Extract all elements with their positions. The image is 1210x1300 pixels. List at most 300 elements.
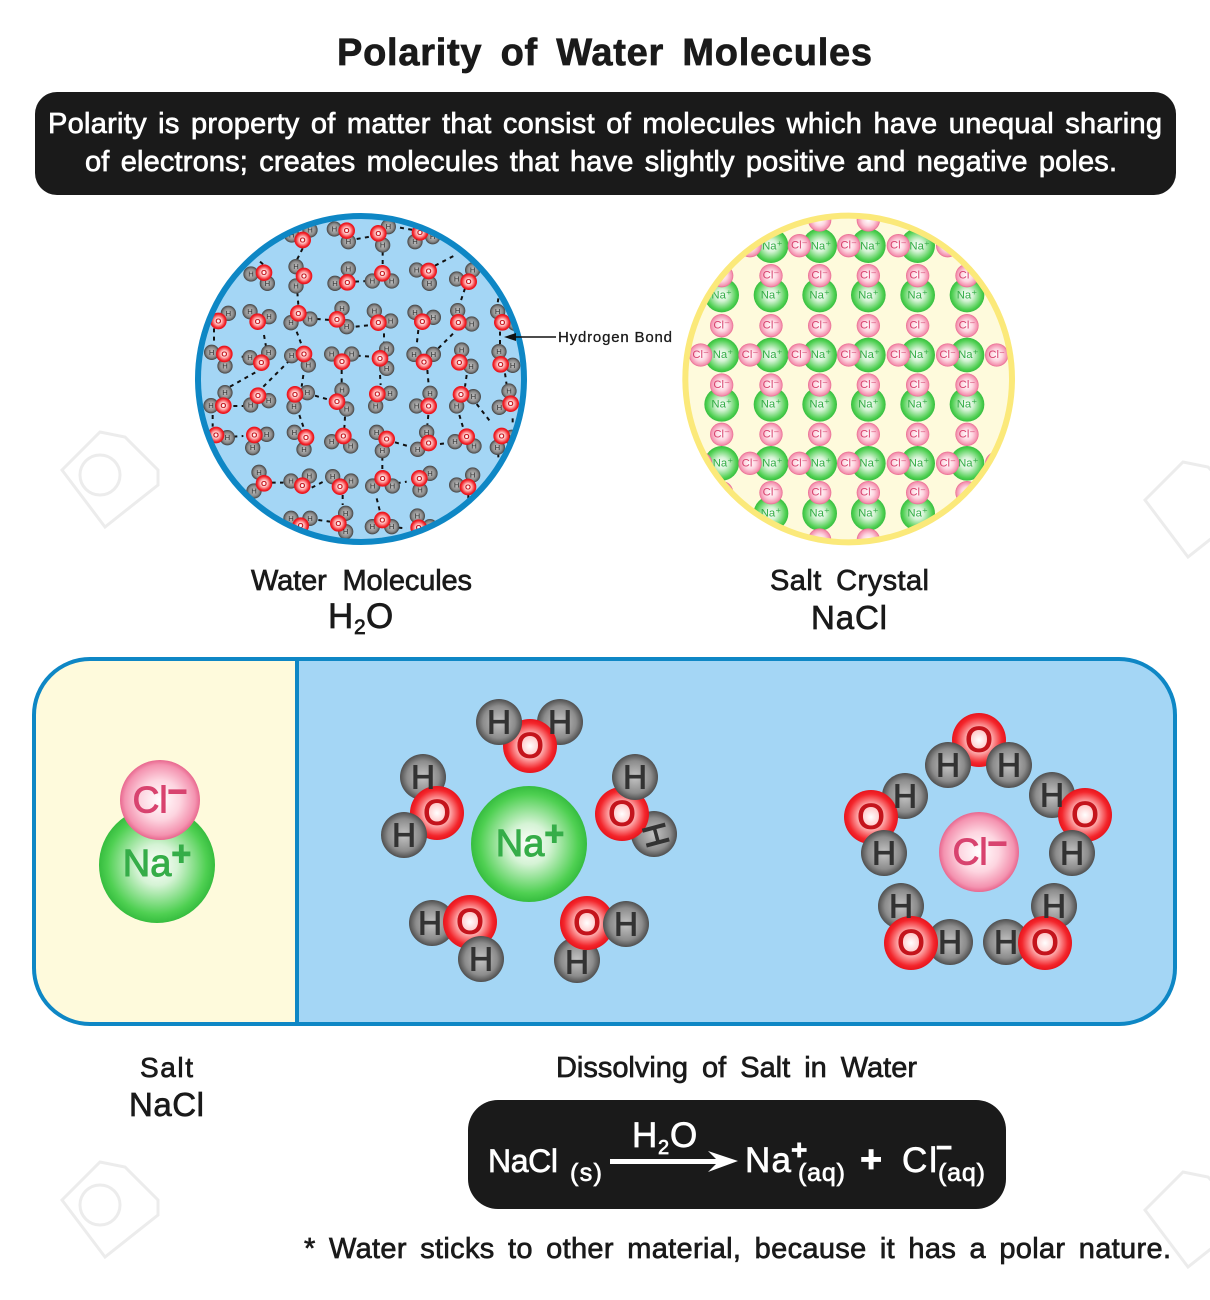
panel: salt crystal circle: Na⁺ (909, 349, 929, 361)
icon: chloride ion with water molecules: H (893, 778, 917, 814)
panel: water molecules circle: H (307, 514, 313, 523)
panel: water molecules circle: H (349, 349, 354, 358)
panel: water molecules circle: H (346, 237, 351, 246)
panel: salt crystal circle: Na⁺ (809, 290, 830, 302)
panel: salt crystal circle: Cl⁻ (811, 320, 828, 332)
panel: salt crystal circle: Na⁺ (860, 240, 881, 252)
panel: salt crystal circle: Cl⁻ (713, 428, 730, 440)
panel: salt crystal circle: Cl⁻ (713, 379, 730, 391)
definition banner: of electrons; creates molecules that have slightly positive and negative poles. (85, 146, 1117, 178)
panel: water molecules circle: H (415, 511, 420, 520)
panel: water molecules circle: H (339, 304, 345, 313)
panel: water molecules circle: H (307, 314, 313, 323)
panel: water molecules circle: H (330, 472, 335, 481)
panel: water molecules circle: O (499, 318, 505, 327)
panel: water molecules circle: H (208, 401, 214, 410)
panel: water molecules circle: H (251, 486, 257, 495)
equation box: − (936, 1132, 952, 1163)
panel: salt crystal circle: Cl⁻ (840, 240, 857, 252)
panel: salt crystal circle: Cl⁻ (763, 428, 779, 440)
equation box: 2 (658, 1137, 669, 1159)
panel: salt crystal circle: Cl⁻ (860, 487, 877, 499)
panel: salt crystal circle: Na⁺ (762, 457, 783, 469)
panel: water molecules circle: H (471, 392, 476, 401)
panel: water molecules circle: H (307, 471, 312, 480)
icon: sodium ion with water molecules: H (487, 704, 511, 740)
icon: sodium ion with water molecules: H (392, 816, 416, 854)
icon: chloride ion with water molecules: O (857, 798, 885, 836)
icon: sodium ion with water molecules: H (635, 819, 677, 851)
panel: salt crystal circle: Cl⁻ (988, 349, 1005, 361)
panel: salt crystal circle: Na⁺ (907, 290, 928, 302)
panel: water molecules circle: H (411, 350, 417, 359)
panel: water molecules circle: H (414, 265, 419, 274)
panel: water molecules circle: H (386, 222, 391, 231)
panel: water molecules circle: O (221, 349, 227, 358)
panel: water molecules circle: H (306, 360, 311, 369)
equation box: + (860, 1139, 882, 1181)
panel: water molecules circle: H (454, 401, 459, 410)
panel: water molecules circle: H (380, 446, 385, 455)
panel: salt crystal circle: Na⁺ (811, 457, 831, 469)
icon: chloride ion with water molecules: H (1042, 888, 1066, 924)
panel: water molecules circle: H (248, 269, 254, 278)
panel: salt crystal circle: Cl⁻ (909, 320, 926, 332)
panel: salt crystal circle: Cl⁻ (811, 270, 828, 282)
panel: water molecules circle: H (332, 279, 338, 288)
panel: salt crystal circle: Na⁺ (711, 398, 732, 410)
icon: chloride ion with water molecules: H (994, 924, 1018, 960)
label: water molecules (251, 565, 472, 639)
panel: water molecules circle: O (215, 316, 221, 325)
panel: water molecules circle: H (225, 433, 230, 442)
panel: salt crystal circle: Cl⁻ (692, 349, 709, 361)
panel: water molecules circle: O (508, 399, 514, 408)
equation box (468, 1100, 1006, 1209)
icon: sodium ion with water molecules: Na (496, 823, 544, 865)
panel: water molecules circle: O (334, 315, 340, 324)
panel: salt crystal circle: Na⁺ (809, 507, 830, 519)
panel: water molecules circle: H (389, 522, 394, 531)
panel: water molecules circle: H (496, 347, 502, 356)
panel: water molecules circle: H (454, 480, 459, 489)
panel: water molecules circle: O (258, 358, 264, 367)
label: salt: NaCl (129, 1086, 204, 1123)
icon: sodium ion with water molecules: O (608, 794, 636, 834)
panel: salt crystal circle: Cl⁻ (763, 320, 779, 332)
panel: water molecules circle: H (288, 476, 294, 485)
panel: water molecules circle: O (298, 521, 304, 530)
equation box: Na (745, 1141, 792, 1180)
panel: salt crystal circle: Na⁺ (958, 457, 979, 469)
label: water molecules: H (328, 597, 353, 636)
panel: water molecules circle: O (344, 226, 350, 235)
panel: salt crystal circle: Na⁺ (809, 398, 830, 410)
panel: water molecules circle: O (374, 389, 380, 398)
panel: water molecules circle: O (337, 482, 343, 491)
label: salt: Salt (140, 1052, 193, 1083)
panel: water molecules circle: H (307, 225, 313, 234)
panel: salt crystal circle: Cl⁻ (791, 240, 808, 252)
panel: water molecules circle: H (289, 351, 294, 360)
panel: water molecules circle: O (426, 401, 432, 410)
footnote: * Water sticks to other material, because it has a polar nature. (304, 1233, 1171, 1265)
icon: sodium ion with water molecules: O (423, 794, 451, 832)
panel: salt crystal circle: Cl⁻ (811, 379, 828, 391)
panel: salt crystal circle: Cl⁻ (860, 379, 877, 391)
panel: salt crystal circle: Na⁺ (909, 457, 929, 469)
panel: salt crystal circle: Cl⁻ (959, 428, 975, 440)
panel: salt crystal circle: Na⁺ (762, 349, 783, 361)
panel: water molecules circle: H (288, 514, 294, 523)
panel: water molecules circle: H (430, 232, 435, 241)
panel: water molecules circle: H (209, 348, 214, 357)
panel: water molecules circle: O (340, 431, 346, 440)
panel: water molecules circle: H (452, 437, 458, 446)
label: water molecules: Water Molecules (251, 565, 472, 597)
panel: salt crystal circle: Na⁺ (711, 290, 732, 302)
panel: water molecules circle: H (348, 441, 353, 450)
panel: water molecules circle: O (292, 390, 298, 399)
panel: salt crystal circle: Cl⁻ (791, 457, 808, 469)
panel: water molecules circle: H (455, 306, 460, 315)
panel: water molecules circle: O (344, 278, 350, 287)
panel: salt crystal circle: Cl⁻ (811, 428, 828, 440)
panel: water molecules circle: H (509, 433, 514, 442)
panel: water molecules circle: H (264, 430, 269, 439)
icon: chloride ion with water molecules: H (889, 888, 913, 924)
panel: water molecules circle: H (372, 306, 377, 315)
equation box: O (670, 1116, 697, 1155)
panel: salt crystal circle: Na⁺ (713, 349, 733, 361)
panel: salt crystal circle: Na⁺ (958, 349, 979, 361)
panel: water molecules circle: O (458, 390, 464, 399)
panel: salt crystal circle: Cl⁻ (909, 487, 926, 499)
panel: water molecules circle: H (265, 279, 270, 288)
label: salt crystal: Salt Crystal (770, 565, 929, 597)
equation box: Cl (902, 1141, 937, 1180)
definition banner (35, 92, 1176, 195)
icon: salt ion pair: Na (123, 843, 171, 885)
panel: dissolving diagram (34, 659, 1175, 1024)
panel: water molecules circle: H (348, 476, 354, 485)
panel: salt crystal circle: Cl⁻ (860, 270, 877, 282)
panel: water molecules circle: H (339, 385, 345, 394)
panel: salt crystal circle: Na⁺ (713, 457, 733, 469)
panel: water molecules circle: O (465, 482, 471, 491)
panel: water molecules circle: O (455, 318, 461, 327)
panel: salt crystal circle: Cl⁻ (939, 457, 956, 469)
icon: salt ion pair (99, 760, 215, 923)
panel: water molecules circle: H (305, 388, 310, 397)
panel: salt crystal circle: Cl⁻ (959, 270, 975, 282)
panel: salt crystal circle: Cl⁻ (763, 270, 779, 282)
panel: water molecules circle: O (295, 309, 301, 318)
icon: chloride ion with water molecules: H (1060, 834, 1084, 872)
panel: salt crystal circle: Na⁺ (957, 290, 977, 302)
panel: salt crystal circle: Na⁺ (858, 507, 879, 519)
panel: water molecules circle: H (469, 319, 474, 328)
panel: water molecules circle: H (291, 402, 297, 411)
panel: water molecules circle: H (226, 309, 231, 318)
panel: water molecules circle: O (261, 268, 267, 277)
panel: salt crystal circle: Na⁺ (761, 507, 781, 519)
equation box: (aq) (938, 1159, 985, 1187)
panel: water molecules circle: H (495, 307, 500, 316)
panel: water molecules circle: H (384, 344, 389, 353)
panel: salt crystal circle: Cl⁻ (840, 457, 857, 469)
icon: sodium ion with water molecules: O (456, 902, 484, 942)
equation box: NaCl (488, 1143, 558, 1179)
panel: water molecules circle: H (427, 389, 433, 398)
panel: water molecules circle: H (293, 281, 299, 290)
panel: water molecules circle: O (301, 271, 307, 280)
panel: water molecules circle: H (301, 445, 307, 454)
panel: water molecules circle: H (471, 441, 477, 450)
panel: water molecules circle: H (289, 230, 294, 239)
panel: water molecules circle: H (370, 522, 375, 531)
panel: water molecules circle: O (380, 474, 386, 483)
panel: water molecules circle: O (261, 479, 267, 488)
icon: chloride ion with water molecules: H (872, 834, 896, 872)
panel: water molecules circle: H (388, 316, 393, 325)
panel: water molecules circle: H (470, 470, 475, 479)
panel: water molecules circle: H (380, 240, 385, 249)
panel: water molecules circle: H (389, 276, 394, 285)
panel: water molecules circle: O (416, 523, 422, 532)
panel: water molecules circle: H (506, 386, 512, 395)
panel: salt crystal circle: Cl⁻ (840, 349, 857, 361)
panel: water molecules circle: O (426, 438, 432, 447)
label: salt crystal: NaCl (811, 599, 887, 636)
panel: water molecules circle: H (346, 264, 351, 273)
panel: water molecules circle: H (454, 274, 459, 283)
panel: salt crystal circle: Cl⁻ (791, 349, 808, 361)
panel: salt crystal circle: Cl⁻ (811, 487, 828, 499)
panel: water molecules circle (198, 216, 524, 542)
panel: water molecules circle: H (293, 262, 299, 271)
panel: water molecules circle: O (213, 430, 219, 439)
icon: sodium ion with water molecules: H (614, 906, 638, 942)
icon: sodium ion with water molecules (381, 699, 677, 983)
arrow: reaction (610, 1151, 738, 1172)
icon: salt ion pair: − (168, 773, 187, 811)
panel: water molecules circle: O (384, 434, 390, 443)
panel: water molecules circle: O (466, 277, 472, 286)
panel: water molecules circle: O (303, 433, 309, 442)
icon: sodium ion with water molecules: H (623, 758, 647, 796)
panel: salt crystal circle: Na⁺ (907, 398, 928, 410)
panel: water molecules circle: O (300, 235, 306, 244)
panel: water molecules circle: H (459, 345, 464, 354)
panel: water molecules circle: O (426, 266, 432, 275)
panel: water molecules circle: H (387, 389, 393, 398)
panel: water molecules circle: O (421, 357, 427, 366)
panel: water molecules circle: H (427, 279, 432, 288)
panel: water molecules circle: O (334, 397, 340, 406)
panel: salt crystal circle: Cl⁻ (742, 457, 758, 469)
panel: salt crystal circle: Na⁺ (761, 398, 781, 410)
icon: sodium ion with water molecules: + (544, 815, 564, 853)
panel: salt crystal circle: Na⁺ (859, 457, 880, 469)
panel: water molecules circle: H (343, 509, 348, 518)
panel: water molecules circle: H (412, 237, 418, 246)
panel: water molecules circle: H (468, 362, 474, 371)
panel: water molecules circle: O (255, 391, 261, 400)
icon: chloride ion with water molecules: O (897, 924, 925, 962)
panel: water molecules circle: H (384, 364, 389, 373)
hydrogen bond callout (504, 329, 672, 346)
panel: water molecules circle: H (510, 361, 515, 370)
panel: water molecules circle: H (427, 469, 433, 478)
panel: salt crystal circle: Cl⁻ (890, 240, 907, 252)
icon: sodium ion with water molecules: O (573, 904, 601, 942)
panel: water molecules circle: H (248, 400, 253, 409)
panel: salt crystal circle: Na⁺ (909, 240, 930, 252)
icon: chloride ion with water molecules: O (1071, 796, 1099, 834)
panel: water molecules circle: O (375, 318, 381, 327)
label: water molecules: 2 (354, 616, 366, 639)
panel: salt crystal circle: Cl⁻ (959, 379, 975, 391)
title: Polarity of Water Molecules (337, 32, 872, 74)
panel: water molecules circle: H (222, 361, 228, 370)
panel: salt crystal circle: Na⁺ (907, 507, 928, 519)
panel: salt crystal circle: Na⁺ (762, 240, 783, 252)
icon: chloride ion with water molecules: O (965, 720, 993, 760)
panel: salt crystal circle (685, 208, 1012, 552)
icon: salt ion pair: + (171, 835, 191, 873)
panel: salt crystal circle: Na⁺ (957, 398, 977, 410)
panel: salt crystal circle: Cl⁻ (713, 320, 730, 332)
label: water molecules: O (366, 597, 393, 636)
panel: water molecules circle: H (424, 428, 429, 437)
label: dissolving of salt in water: Dissolving of Salt in Water (556, 1052, 917, 1084)
panel: salt crystal circle: Cl⁻ (860, 320, 877, 332)
panel: water molecules circle: H (344, 404, 349, 413)
panel: water molecules circle: H (288, 318, 294, 327)
panel: water molecules circle: H (332, 224, 337, 233)
panel: water molecules circle: H (497, 403, 502, 412)
icon: chloride ion with water molecules: H (938, 924, 962, 960)
equation box: + (791, 1134, 807, 1165)
panel: salt crystal circle: Cl⁻ (742, 349, 758, 361)
panel: water molecules circle: H (412, 308, 418, 317)
equation box: (aq) (798, 1159, 845, 1187)
panel: salt crystal circle: Na⁺ (811, 240, 831, 252)
equation box: (s) (570, 1159, 602, 1187)
panel: water molecules circle: O (379, 269, 385, 278)
panel: salt crystal circle: Cl⁻ (890, 349, 907, 361)
panel: salt crystal circle: Cl⁻ (763, 379, 779, 391)
icon: chloride ion with water molecules: H (997, 746, 1021, 784)
icon: chloride ion with water molecules: Cl (953, 832, 988, 872)
icon: sodium ion with water molecules: H (565, 944, 589, 980)
panel: water molecules circle: H (370, 481, 375, 490)
panel: salt crystal circle: Na⁺ (761, 290, 781, 302)
panel: water molecules circle: H (495, 443, 500, 452)
panel: water molecules circle: O (499, 431, 505, 440)
panel: water molecules circle: H (256, 468, 262, 477)
panel: water molecules circle: H (250, 443, 255, 452)
panel: water molecules circle: O (335, 519, 341, 528)
panel: salt crystal circle: Na⁺ (858, 290, 879, 302)
panel: water molecules circle: O (417, 228, 423, 237)
panel: water molecules circle: H (247, 353, 253, 362)
panel: water molecules circle: H (266, 312, 272, 321)
panel: salt crystal circle: Na⁺ (858, 398, 879, 410)
panel: water molecules circle: H (329, 437, 334, 446)
panel: water molecules circle: O (301, 349, 307, 358)
panel: water molecules circle: O (375, 229, 381, 238)
panel: water molecules circle: H (266, 396, 271, 405)
panel: salt crystal circle: Cl⁻ (909, 379, 926, 391)
panel: water molecules circle: H (373, 401, 378, 410)
panel: water molecules circle: H (417, 485, 423, 494)
panel: water molecules circle: H (247, 307, 253, 316)
panel: water molecules circle: H (470, 265, 475, 274)
panel: water molecules circle: H (344, 322, 349, 331)
panel: salt crystal circle: Cl⁻ (860, 428, 877, 440)
panel: salt crystal circle: Cl⁻ (909, 428, 926, 440)
icon: chloride ion with water molecules (844, 713, 1112, 970)
icon: chloride ion with water molecules: O (1031, 924, 1059, 962)
icon: chloride ion with water molecules: H (936, 746, 960, 784)
panel: salt crystal circle: Cl⁻ (959, 320, 975, 332)
panel: water molecules circle: O (456, 358, 462, 367)
panel: water molecules circle: H (370, 276, 375, 285)
label: salt (129, 1052, 204, 1123)
panel: water molecules circle: O (379, 515, 385, 524)
icon: salt ion pair: Cl (133, 780, 168, 820)
icon: sodium ion with water molecules: O (516, 726, 544, 766)
panel: water molecules circle: O (339, 357, 345, 366)
equation box: H (632, 1116, 657, 1155)
icon: sodium ion with water molecules: H (418, 904, 442, 942)
panel: water molecules circle: H (222, 388, 228, 397)
icon: chloride ion with water molecules: − (988, 825, 1007, 863)
icon: chloride ion with water molecules: H (1040, 776, 1064, 814)
panel: salt crystal circle: Cl⁻ (939, 349, 956, 361)
panel: salt crystal circle: Na⁺ (859, 349, 880, 361)
icon: sodium ion with water molecules: H (548, 704, 572, 740)
panel: water molecules circle: H (415, 445, 420, 454)
panel: water molecules circle: O (464, 432, 470, 441)
panel: water molecules circle: H (431, 350, 436, 359)
panel: water molecules circle: H (414, 401, 419, 410)
panel: water molecules circle: H (343, 527, 348, 536)
panel: water molecules circle: O (419, 317, 425, 326)
panel: water molecules circle: O (498, 360, 504, 369)
panel: salt crystal circle: Cl⁻ (909, 270, 926, 282)
panel: salt crystal circle: Cl⁻ (890, 457, 907, 469)
panel: water molecules circle: O (220, 401, 226, 410)
panel: water molecules circle: H (390, 481, 395, 490)
panel: water molecules circle: O (416, 474, 422, 483)
icon: sodium ion with water molecules: H (469, 940, 493, 978)
panel: water molecules circle: O (377, 354, 383, 363)
panel: water molecules circle: H (374, 428, 379, 437)
panel: water molecules circle: O (255, 317, 261, 326)
panel: water molecules circle: H (329, 349, 334, 358)
panel: salt crystal circle: Cl⁻ (763, 487, 779, 499)
panel: water molecules circle: H (292, 428, 297, 437)
panel: water molecules circle: O (299, 481, 305, 490)
panel: water molecules circle: H (431, 313, 436, 322)
definition banner: Polarity is property of matter that consist of molecules which have unequal sharing (48, 108, 1162, 140)
panel: water molecules circle: H (266, 348, 271, 357)
panel: water molecules circle: O (251, 430, 257, 439)
hydrogen bond callout: Hydrogen Bond (558, 329, 672, 346)
